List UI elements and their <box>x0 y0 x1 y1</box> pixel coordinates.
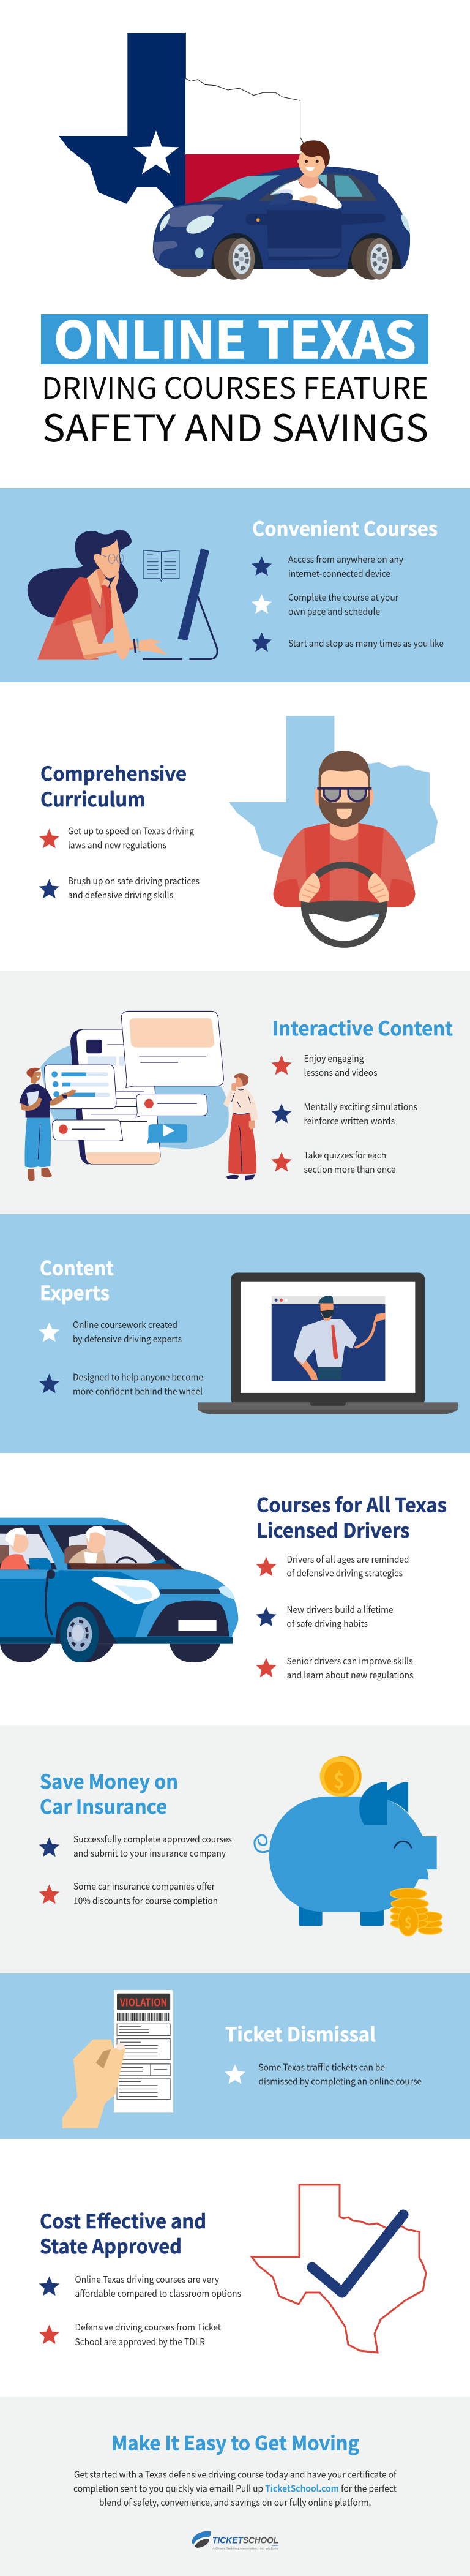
heading: Convenient Courses: Convenient Courses <box>252 514 438 542</box>
closing paragraph: Get started with a Texas defensive driving course today and have your certificate of <box>74 2468 397 2481</box>
bullet: quizzes: section more than once <box>304 1163 395 1176</box>
bullet: discounts: 10% discounts for course completion <box>73 1894 218 1907</box>
panel: Cost Effective and State Approved <box>0 2139 470 2397</box>
illustration: bearded driver <box>274 751 415 944</box>
bullet: simulations: reinforce written words <box>304 1114 395 1127</box>
heading: Cost Effective and State Approved: Cost Effective and <box>40 2206 206 2234</box>
bullet: coursework <box>39 1318 182 1345</box>
bullet: TDLR approved: Defensive driving courses from Ticket <box>75 2321 221 2334</box>
heading: Content Experts: Content <box>40 1253 114 1281</box>
illustration: piggy bank with coins: $ <box>405 1911 412 1932</box>
bullet: safe driving: Brush up on safe driving practices <box>68 874 200 887</box>
bullet: quizzes <box>271 1149 395 1176</box>
bullet: new drivers <box>256 1603 393 1630</box>
bullet: seniors <box>256 1654 414 1681</box>
bullet: confidence: Designed to help anyone become <box>73 1370 203 1384</box>
illustration: piggy bank with coins <box>255 1756 442 1936</box>
heading: Comprehensive Curriculum: Comprehensive <box>40 759 187 787</box>
bullet: pace: Complete the course at your <box>288 591 398 604</box>
figure: woman thinking <box>223 1073 258 1180</box>
figure: man presenting <box>20 1068 76 1181</box>
illustration: seniors in blue car <box>0 1518 238 1662</box>
bullet: seniors: Senior drivers can improve skills <box>286 1654 412 1667</box>
heading: Comprehensive Curriculum: Curriculum <box>40 784 146 813</box>
title line 2: DRIVING COURSES FEATURE <box>42 364 428 407</box>
bullet: access: Access from anywhere on any <box>288 553 403 566</box>
bullet: Texas laws <box>39 824 194 851</box>
bullet: approved courses: Successfully complete approved courses <box>73 1833 232 1846</box>
bullet: dismissal: Some Texas traffic tickets can be <box>258 2061 385 2073</box>
bullet: dismissal: dismissed by completing an online course <box>258 2075 422 2088</box>
bullet: all ages <box>256 1553 409 1580</box>
bullet: TDLR approved <box>39 2321 221 2348</box>
panel: Save Money on Car Insurance <box>0 1725 470 1973</box>
icon: Texas flag map <box>59 33 304 207</box>
bullet: approved courses <box>39 1833 232 1860</box>
panel: Content Experts <box>0 1214 470 1453</box>
panel: header <box>41 33 428 442</box>
bullet: start and stop <box>252 632 444 652</box>
bullet: all ages: of defensive driving strategies <box>286 1566 403 1580</box>
heading: Save Money on Car Insurance: Save Money on <box>40 1767 178 1795</box>
illustration: woman at computer <box>28 530 217 660</box>
bullet: pace: own pace and schedule <box>288 605 380 618</box>
bullet: pace <box>252 591 398 618</box>
bullet: quizzes: Take quizzes for each <box>304 1149 386 1162</box>
heading: Cost Effective and State Approved <box>40 2206 206 2259</box>
bullet: affordable <box>39 2273 241 2300</box>
heading: Cost Effective and State Approved: State Approved <box>40 2231 182 2259</box>
panel: closing call to action <box>0 2397 470 2576</box>
logo: TicketSchool: .com <box>272 2544 279 2547</box>
bullet: safe driving: and defensive driving skills <box>68 888 173 901</box>
heading: Save Money on Car Insurance: Car Insurance <box>40 1792 167 1820</box>
bullet: all ages: Drivers of all ages are reminded <box>286 1553 409 1566</box>
bullet: discounts: Some car insurance companies offer <box>73 1880 215 1893</box>
icon: Texas outline with check mark <box>252 2185 426 2353</box>
heading: Interactive Content: Interactive Content <box>272 1013 453 1042</box>
bullet: lessons <box>271 1052 377 1079</box>
bullet: Texas laws: Get up to speed on Texas driving <box>68 824 194 838</box>
illustration: laptop with instructor <box>198 1272 458 1414</box>
closing paragraph <box>73 2468 397 2509</box>
panel: Comprehensive Curriculum <box>0 682 470 971</box>
bullet: lessons: lessons and videos <box>304 1066 377 1079</box>
bullet: affordable: Online Texas driving courses are very <box>75 2273 219 2286</box>
heading: Content Experts: Experts <box>40 1278 110 1306</box>
figure: woman with glasses <box>28 530 161 660</box>
bullet: confidence <box>39 1370 203 1397</box>
bullet: lessons: Enjoy engaging <box>304 1052 364 1065</box>
panel: Convenient Courses <box>0 488 470 682</box>
icon: computer monitor <box>143 548 217 659</box>
bullet: safe driving <box>39 874 200 901</box>
illustration: piggy bank with coins: $ <box>334 1765 345 1794</box>
icon: Texas silhouette <box>229 716 438 917</box>
title line 3: SAFETY AND SAVINGS <box>42 398 428 452</box>
panel: Interactive Content <box>0 971 470 1214</box>
bullet: Texas laws: laws and new regulations <box>68 839 166 851</box>
panel: Ticket Dismissal <box>0 1973 470 2139</box>
bullet: seniors: and learn about new regulations <box>286 1669 414 1681</box>
bullet: start and stop: Start and stop as many times as you like <box>288 637 444 650</box>
bullet: access <box>252 553 403 580</box>
logo: TicketSchool: A Driver Training Associates, Inc. Website <box>212 2547 279 2550</box>
illustration: hand holding violation ticket: VIOLATION <box>119 1994 167 2010</box>
bullet: simulations: Mentally exciting simulations <box>304 1100 417 1113</box>
title line 1: ONLINE TEXAS <box>54 300 416 373</box>
heading: Courses for All Texas Licensed Drivers <box>256 1490 447 1544</box>
logo: TicketSchool <box>192 2531 279 2550</box>
heading: Courses for All Texas Licensed Drivers: Courses for All Texas <box>256 1490 447 1519</box>
heading: Save Money on Car Insurance <box>40 1767 178 1820</box>
bullet: dismissal <box>225 2061 422 2088</box>
icon: open book <box>143 550 179 581</box>
bullet: access: internet-connected device <box>288 567 390 580</box>
bullet: new drivers: New drivers build a lifetime <box>286 1603 393 1616</box>
heading: Courses for All Texas Licensed Drivers: Licensed Drivers <box>256 1515 410 1544</box>
title <box>41 300 428 452</box>
illustration: interactive lessons on phone <box>20 1011 258 1181</box>
title banner <box>41 314 428 364</box>
illustration: hand holding violation ticket <box>62 1990 173 2128</box>
bullet: coursework: Online coursework created <box>73 1318 177 1331</box>
bullet: coursework: by defensive driving experts <box>73 1332 182 1345</box>
bullet: TDLR approved: School are approved by the TDLR <box>75 2335 205 2348</box>
heading: Comprehensive Curriculum <box>40 759 187 813</box>
closing paragraph: blend of safety, convenience, and savings on our fully online platform. <box>99 2496 371 2509</box>
bullet: discounts <box>39 1880 218 1907</box>
panel: Courses for All Texas Licensed Drivers <box>0 1453 470 1725</box>
heading: Ticket Dismissal: Ticket Dismissal <box>225 2019 376 2048</box>
icon: driver in blue car <box>153 140 410 280</box>
bullet: simulations <box>271 1100 417 1127</box>
bullet: approved courses: and submit to your insurance company <box>73 1847 226 1860</box>
logo: TicketSchool: TICKET <box>212 2535 244 2546</box>
bullet: new drivers: of safe driving habits <box>286 1617 368 1630</box>
heading: Make It Easy to Get Moving: Make It Easy to Get Moving <box>111 2428 359 2457</box>
closing paragraph: completion sent to you quickly via email! Pull up TicketSchool.com for the perfect <box>73 2482 397 2495</box>
logo: TicketSchool: SCHOOL <box>243 2535 278 2546</box>
bullet: confidence: more confident behind the wheel <box>73 1385 203 1397</box>
bullet: affordable: affordable compared to classroom options <box>75 2287 241 2300</box>
heading: Content Experts <box>40 1253 114 1306</box>
